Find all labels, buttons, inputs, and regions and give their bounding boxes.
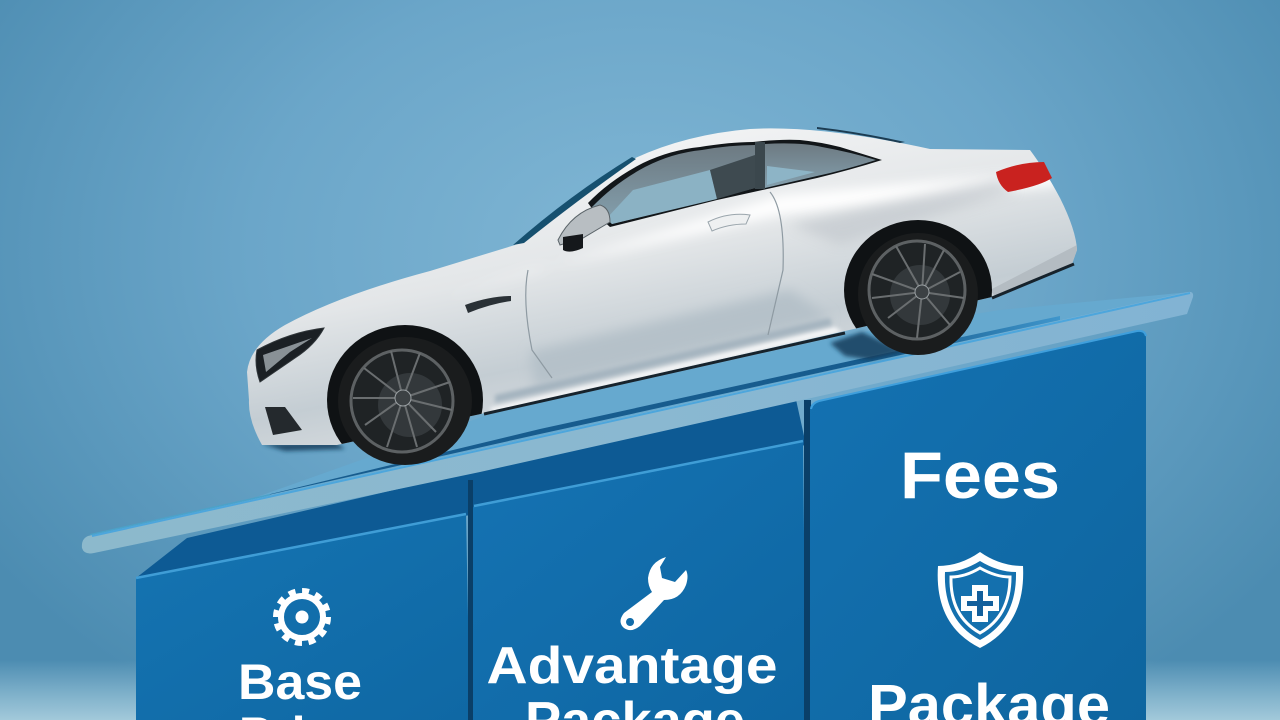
headlight (256, 328, 324, 382)
label: Base Price: Base (238, 654, 362, 710)
windscreen edge (513, 157, 636, 245)
rear wheel (858, 233, 978, 355)
label: Advantage Package: Advantage (486, 637, 778, 695)
door handle (708, 214, 750, 231)
front grille (265, 407, 302, 435)
side windows (588, 140, 882, 227)
car (247, 127, 1077, 475)
block: Base Price (136, 470, 480, 720)
side vent (465, 296, 511, 313)
label: Advantage Package (486, 637, 778, 720)
body shading (327, 176, 1077, 444)
roof edge (817, 127, 905, 143)
icon: gear (276, 591, 328, 643)
car shadow on ramp (262, 332, 905, 451)
icon: shield (938, 552, 1023, 648)
block: Fees and Package (810, 331, 1146, 720)
label: Fees: Fees (900, 438, 1060, 512)
front wheel (338, 337, 472, 465)
door lines (526, 192, 783, 378)
car body (247, 128, 1077, 445)
underbody lines (484, 264, 1074, 414)
ramp (82, 292, 1193, 553)
tail light (996, 162, 1052, 192)
block: Advantage Package (473, 395, 811, 720)
wing mirror (558, 205, 610, 252)
wheel arches (327, 220, 992, 444)
icon: wrench (620, 557, 688, 630)
